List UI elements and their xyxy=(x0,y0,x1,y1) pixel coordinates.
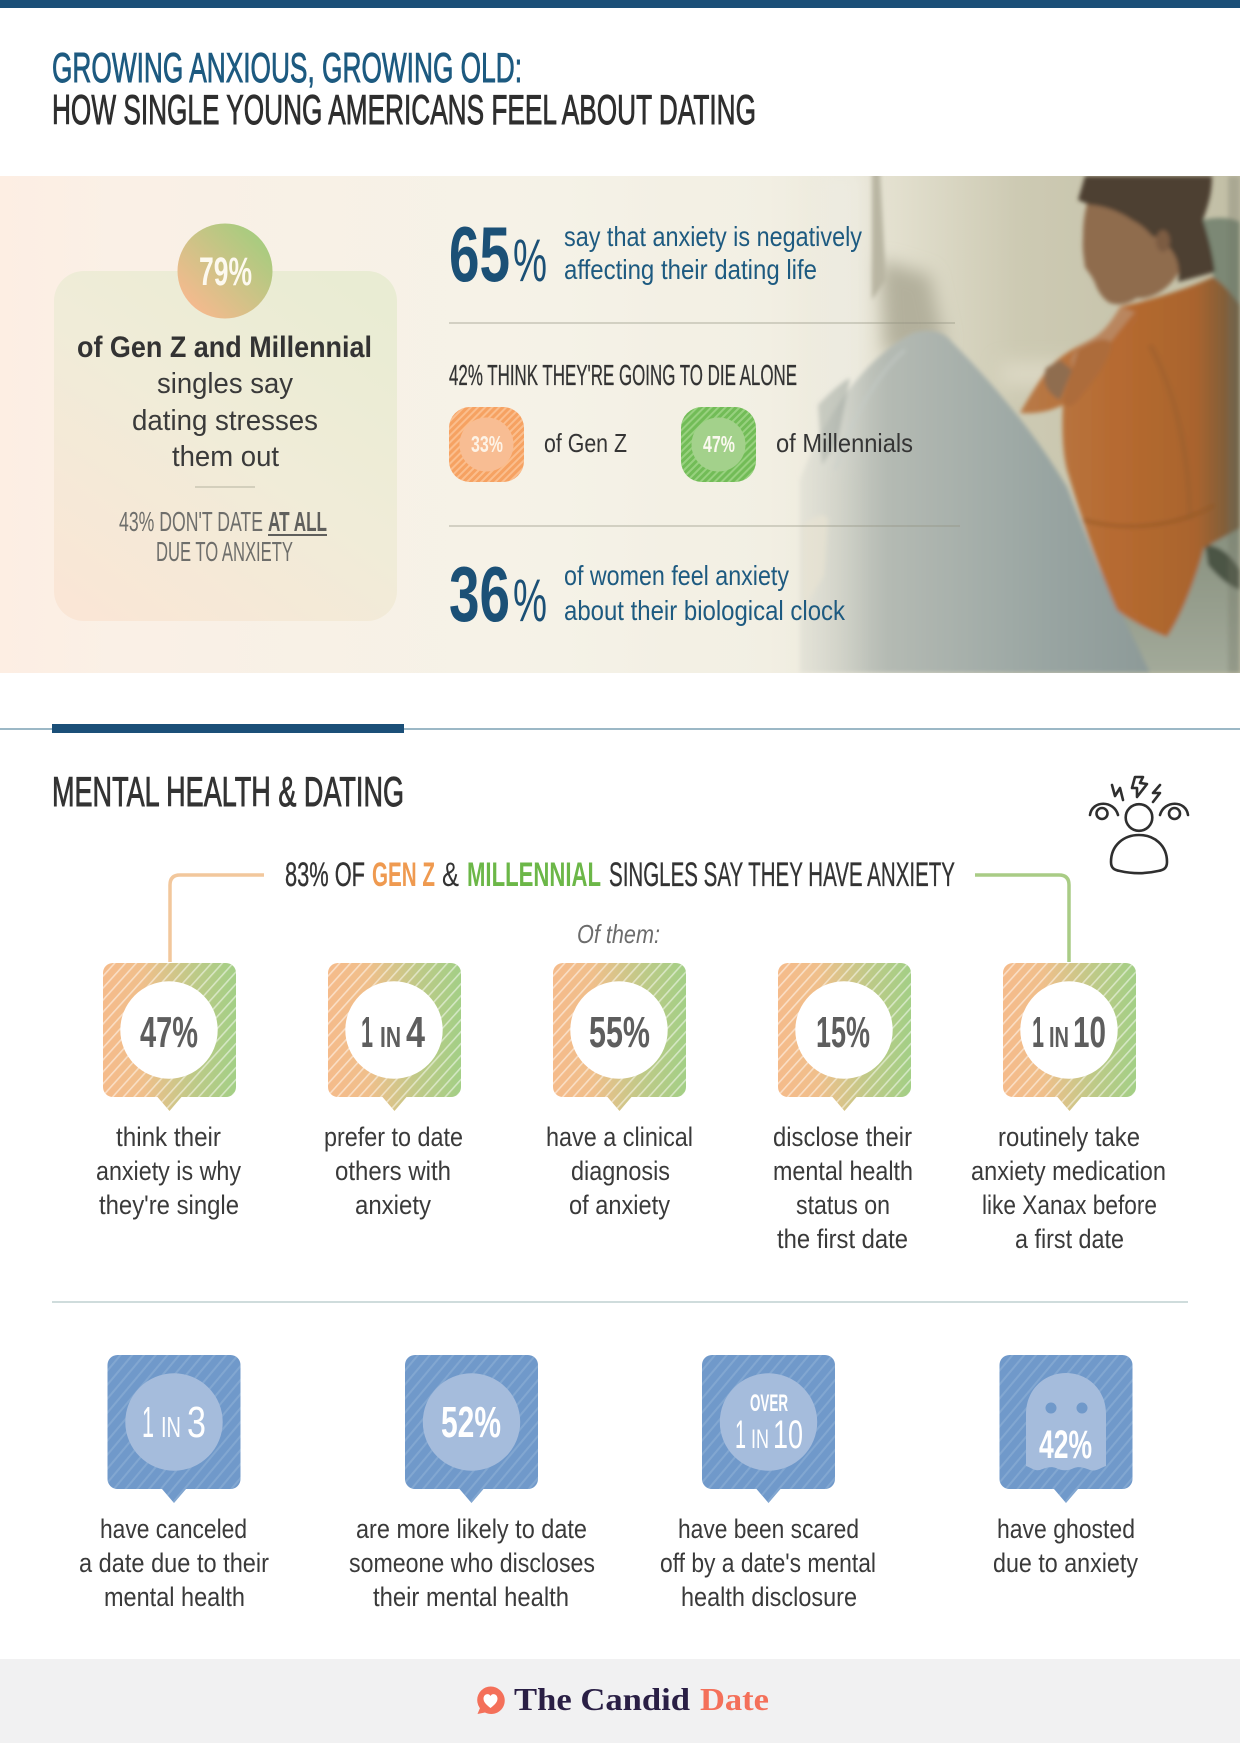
headline segments: 83% OF xyxy=(285,856,365,894)
card: 79% dating stress xyxy=(54,224,397,621)
badge: 33% of Gen Z: of Gen Z xyxy=(544,428,627,458)
stat card: 55%: of anxiety xyxy=(569,1190,671,1220)
stat card: 1 in 3: IN xyxy=(161,1412,181,1444)
title: HOW SINGLE YOUNG AMERICANS FEEL ABOUT DATING xyxy=(52,86,756,133)
stat: 65% xyxy=(449,210,862,298)
heading: mental health and dating: MENTAL HEALTH & DATING xyxy=(52,768,404,815)
stat card: 55%: have a clinical xyxy=(546,1122,693,1152)
stat card: 1 in 10: a first date xyxy=(1015,1224,1124,1254)
stat card: 1 in 10: IN xyxy=(1049,1022,1069,1054)
text block: card statement: dating stresses xyxy=(132,405,318,437)
stat card: over 1 in 10: IN xyxy=(751,1424,769,1454)
stat card: 52%: 52% xyxy=(441,1398,501,1447)
badge: 79% xyxy=(178,224,272,318)
stat card: 52%: someone who discloses xyxy=(349,1548,595,1578)
stat card: over 1 in 10 xyxy=(660,1355,876,1612)
stat: 65%: affecting their dating life xyxy=(564,254,817,285)
stat card: 47%: 47% xyxy=(140,1008,198,1057)
stat card: 1 in 4: 1 xyxy=(361,1008,373,1057)
stat card: 1 in 4: prefer to date xyxy=(324,1122,463,1152)
dividers xyxy=(449,323,960,526)
stat card: 47%: think their xyxy=(116,1122,221,1152)
stat card: 1 in 4: others with xyxy=(335,1156,451,1186)
stat card: 42% ghost: have ghosted xyxy=(997,1514,1135,1544)
stat card: 1 in 4 xyxy=(324,963,463,1220)
stat card: 1 in 4: anxiety xyxy=(355,1190,432,1220)
photo: anxious woman sitting against a wall xyxy=(0,170,1240,673)
stat card: 1 in 10: like Xanax before xyxy=(982,1190,1157,1220)
stat card: over 1 in 10: off by a date's mental xyxy=(660,1548,876,1578)
stat card: 42% ghost: 42% xyxy=(1039,1423,1092,1467)
text block: 43% don't date: DUE TO ANXIETY xyxy=(156,536,293,567)
stat card: 15%: disclose their xyxy=(773,1122,912,1152)
stat card: over 1 in 10: have been scared xyxy=(678,1514,859,1544)
footer xyxy=(0,1659,1240,1743)
badge: 47% of Millennials: of Millennials xyxy=(776,428,913,458)
stat card: 1 in 10: 1 xyxy=(1032,1008,1044,1057)
stat card: 1 in 4: 4 xyxy=(406,1008,425,1057)
badge: 47% of Millennials xyxy=(681,407,913,482)
stat card: 47%: anxiety is why xyxy=(96,1156,242,1186)
callout: 83% have anxiety xyxy=(170,856,1069,962)
headline segments: & xyxy=(442,856,459,894)
stat card: 1 in 10: 10 xyxy=(1073,1008,1106,1057)
connector: left xyxy=(170,875,264,962)
text: of them: Of them: xyxy=(577,919,660,949)
badge: 79%: 79% xyxy=(199,250,252,294)
stat card: 15%: 15% xyxy=(816,1008,870,1057)
logo: The Candid Date: Date xyxy=(700,1681,769,1717)
stat card: 55%: 55% xyxy=(589,1008,650,1057)
stat card: 1 in 3: 3 xyxy=(187,1398,206,1447)
stat: 65%: say that anxiety is negatively xyxy=(564,221,862,252)
stat card: 1 in 3: have canceled xyxy=(100,1514,247,1544)
headline segments xyxy=(285,856,955,894)
text block: card statement: of Gen Z and Millennial xyxy=(77,331,372,364)
stat card: 1 in 10 xyxy=(971,963,1166,1254)
stat card: over 1 in 10: 10 xyxy=(773,1413,803,1457)
text block: card statement xyxy=(77,331,372,473)
stat card: 15%: status on xyxy=(796,1190,890,1220)
stat card: 1 in 3: a date due to their xyxy=(79,1548,269,1578)
panel: hero with photo xyxy=(0,170,1240,673)
section divider xyxy=(0,724,1240,733)
stat card: 1 in 10: routinely take xyxy=(998,1122,1140,1152)
top bar xyxy=(0,0,1240,8)
text block: 43% don't date: 43% DON'T DATE xyxy=(119,506,263,537)
badge: 47% of Millennials: 47% xyxy=(703,431,735,457)
title: GROWING ANXIOUS, GROWING OLD: xyxy=(52,44,522,91)
text block: card statement: them out xyxy=(172,441,279,473)
stat card: 47%: they're single xyxy=(99,1190,239,1220)
stat card: over 1 in 10: health disclosure xyxy=(681,1582,857,1612)
stat card: 1 in 3 xyxy=(79,1355,269,1612)
headline segments: SINGLES SAY THEY HAVE ANXIETY xyxy=(609,856,955,894)
title xyxy=(52,44,756,133)
stat card: 52%: are more likely to date xyxy=(356,1514,587,1544)
stat: 36% xyxy=(449,550,846,638)
stat: 65%: 65 xyxy=(449,210,510,298)
stat card: 1 in 3: mental health xyxy=(104,1582,245,1612)
text block: card statement: singles say xyxy=(157,368,293,400)
text block: 43% don't date: AT ALL xyxy=(268,506,327,537)
stat: 65%: % xyxy=(513,227,547,294)
stat card: 1 in 4: IN xyxy=(380,1022,401,1054)
badge: 33% of Gen Z xyxy=(449,407,627,482)
icon: ghost xyxy=(1026,1373,1106,1471)
stat card: 55%: diagnosis xyxy=(571,1156,670,1186)
stat card: 42% ghost xyxy=(993,1355,1139,1578)
connector: right xyxy=(975,875,1069,962)
headline segments: GEN Z xyxy=(372,856,435,894)
stat card: over 1 in 10: 1 xyxy=(735,1413,746,1457)
stat card: 52% xyxy=(349,1355,595,1612)
stat card: 15%: the first date xyxy=(777,1224,908,1254)
logo: The Candid Date: The Candid xyxy=(514,1681,690,1717)
text block: 43% don't date xyxy=(119,506,327,567)
stat: 36%: of women feel anxiety xyxy=(564,560,789,591)
stat card: 55% xyxy=(546,963,693,1220)
icon: stressed person xyxy=(1090,777,1188,873)
stat card: 1 in 3: 1 xyxy=(142,1398,154,1447)
stat: 36%: % xyxy=(513,567,547,634)
stat card: 15% xyxy=(773,963,913,1254)
stat card: 52%: their mental health xyxy=(373,1582,569,1612)
logo: The Candid Date xyxy=(477,1681,769,1717)
stat: 36%: 36 xyxy=(449,550,510,638)
headline segments: MILLENNIAL xyxy=(467,856,601,894)
badge: 33% of Gen Z: 33% xyxy=(471,431,503,457)
stat: die alone heading: 42% THINK THEY'RE GOING TO DIE ALONE xyxy=(449,360,797,392)
stat card: 15%: mental health xyxy=(773,1156,913,1186)
stat: 36%: about their biological clock xyxy=(564,595,846,626)
stat card: 47% xyxy=(96,963,242,1220)
stat card: over 1 in 10: OVER xyxy=(750,1390,788,1417)
stat card: 1 in 10: anxiety medication xyxy=(971,1156,1166,1186)
stat card: 42% ghost: due to anxiety xyxy=(993,1548,1139,1578)
